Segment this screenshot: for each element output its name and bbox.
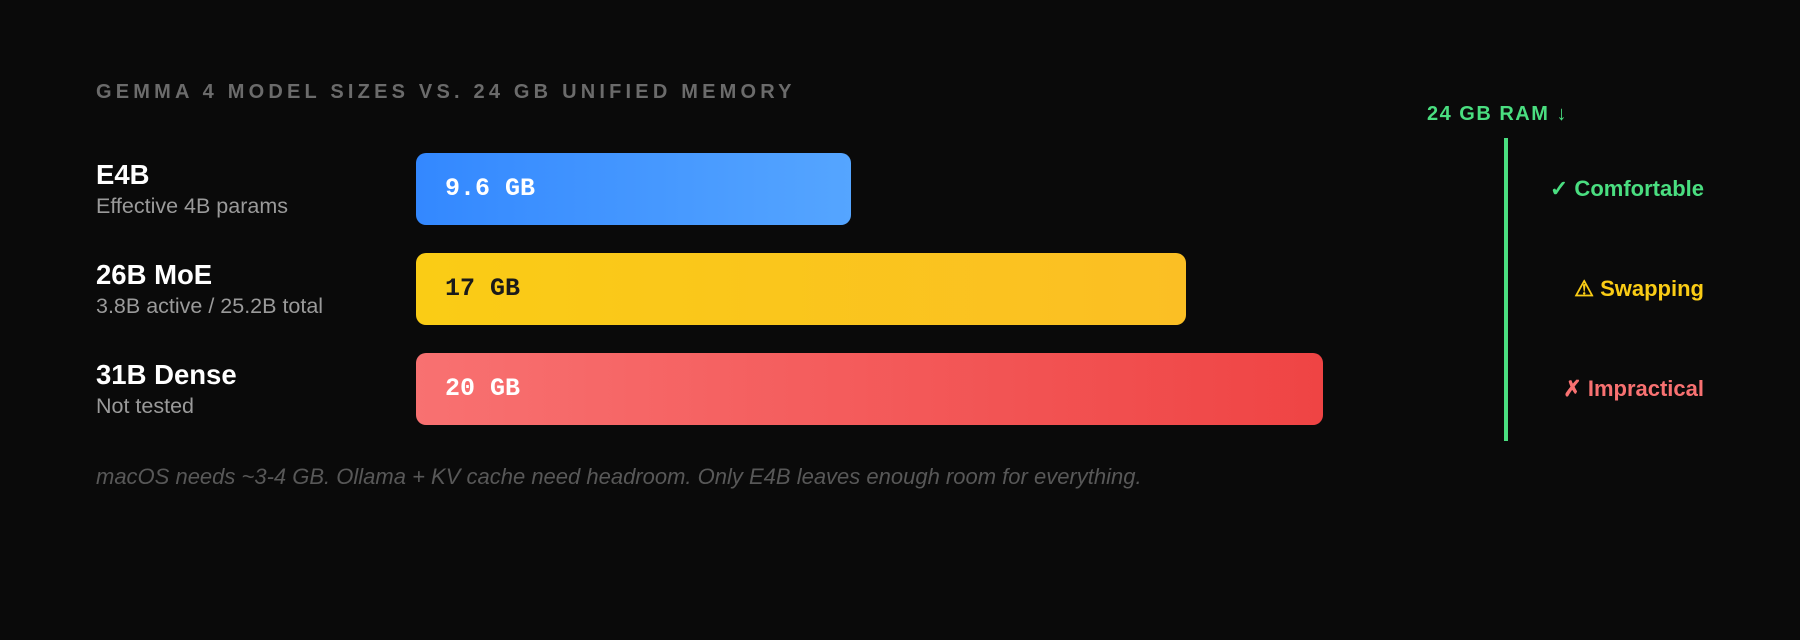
bar: E4B: 9.6 GB xyxy=(445,174,535,203)
label: E4B: E4B xyxy=(96,159,150,190)
label: E4B: Effective 4B params xyxy=(96,194,288,218)
RAM limit line xyxy=(1504,138,1508,441)
label: 26B MoE xyxy=(96,259,323,318)
label: 31B Dense xyxy=(96,359,237,418)
title: GEMMA 4 MODEL SIZES VS. 24 GB UNIFIED MEMORY xyxy=(96,81,796,103)
label: E4B xyxy=(96,159,288,218)
bar: 31B Dense xyxy=(416,353,1323,425)
footnote: macOS needs ~3-4 GB. Ollama + KV cache need headroom. Only E4B leaves enough room for everything. xyxy=(96,464,1142,489)
status: impractical: ✗ Impractical xyxy=(1563,376,1704,401)
bar: 26B MoE xyxy=(416,253,1186,325)
label: 31B Dense: Not tested xyxy=(96,394,194,418)
bar: E4B xyxy=(416,153,851,225)
bar: 26B MoE: 17 GB xyxy=(445,274,520,303)
label: 26B MoE: 3.8B active / 25.2B total xyxy=(96,294,323,318)
label: 31B Dense: 31B Dense xyxy=(96,359,237,390)
status: swapping: ⚠ Swapping xyxy=(1574,276,1704,301)
RAM label: 24 GB RAM ↓ xyxy=(1427,103,1568,125)
label: 26B MoE: 26B MoE xyxy=(96,259,212,290)
status: comfortable: ✓ Comfortable xyxy=(1550,176,1704,201)
bar: 31B Dense: 20 GB xyxy=(445,374,520,403)
